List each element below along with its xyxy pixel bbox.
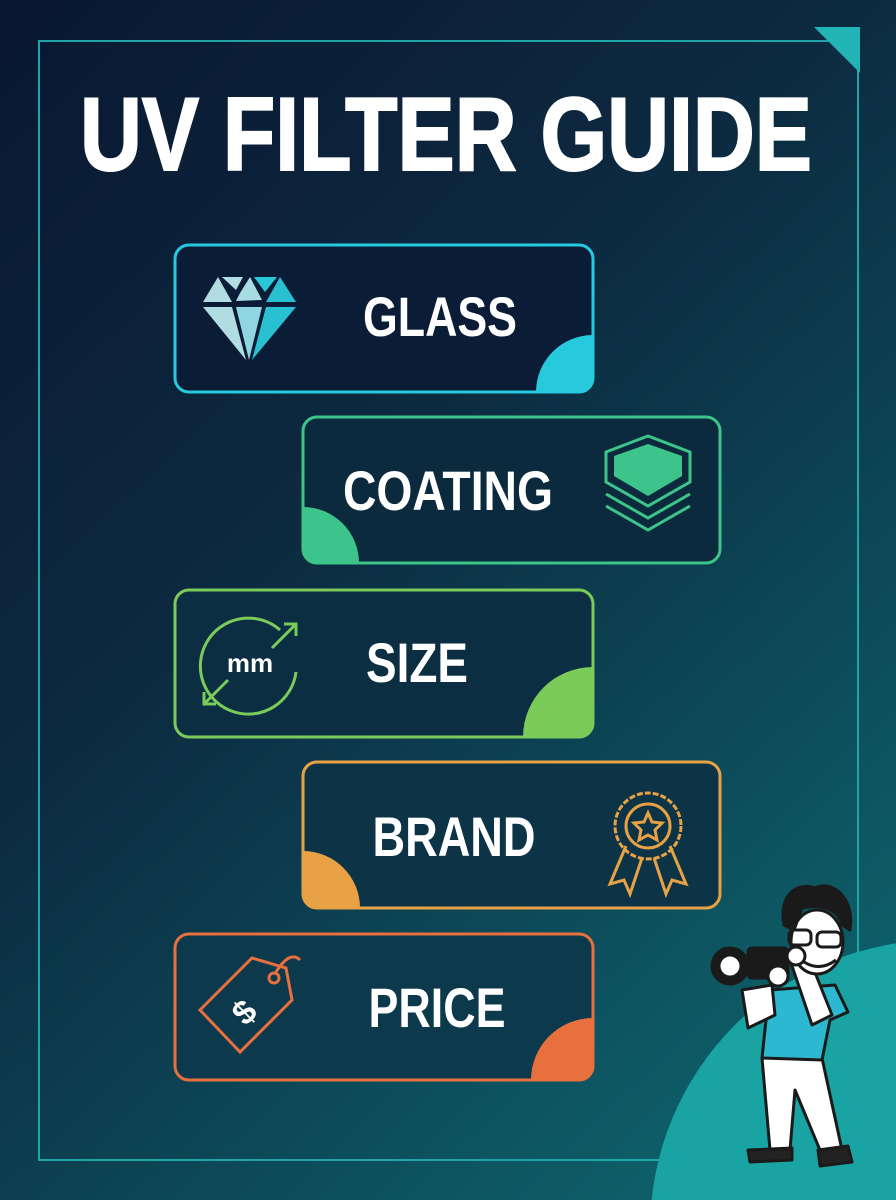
icon: price tag: $ — [225, 993, 265, 1033]
card: price: PRICE — [368, 976, 506, 1039]
card: coating — [302, 416, 722, 564]
card: coating: COATING — [343, 459, 553, 522]
card: price — [174, 932, 594, 1082]
card: size — [174, 588, 594, 738]
card: brand — [302, 760, 722, 910]
icon: shield layers — [606, 436, 690, 530]
card: glass: GLASS — [363, 285, 517, 348]
icon: mm size — [200, 618, 296, 714]
card: brand: BRAND — [372, 805, 536, 868]
icon: diamond — [203, 277, 296, 360]
illustration: photographer — [712, 886, 852, 1166]
icon: award badge — [610, 793, 686, 894]
teal circle backdrop — [650, 940, 896, 1200]
card: glass — [174, 244, 594, 394]
icon: mm size: mm — [227, 648, 273, 678]
card: size: SIZE — [366, 631, 468, 694]
icon: price tag — [200, 957, 300, 1052]
corner triangle accent — [814, 27, 860, 73]
